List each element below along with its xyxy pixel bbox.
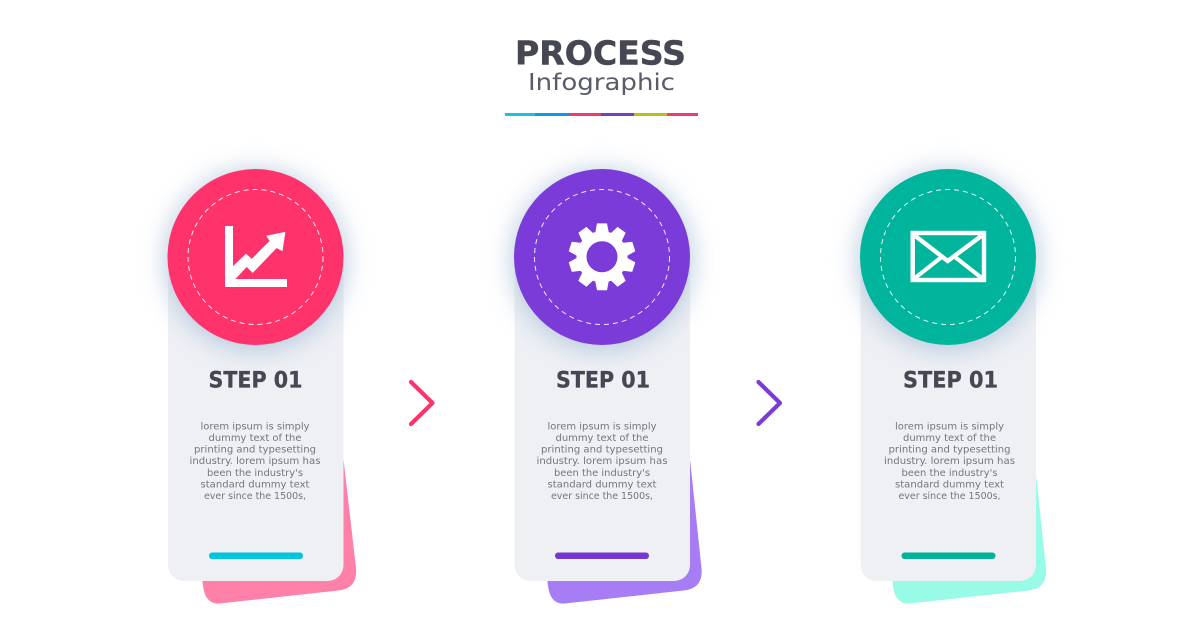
card body — [168, 250, 344, 581]
dashed ring — [534, 190, 670, 324]
body text: been the industry's — [207, 468, 303, 479]
panel: step 2 — [512, 169, 702, 604]
arrow: purple chevron — [758, 382, 780, 424]
body text: ever since the 1500s, — [551, 491, 653, 502]
step heading: STEP 01 — [208, 368, 302, 394]
step heading: STEP 01 — [556, 368, 650, 394]
body text: standard dummy text — [200, 479, 310, 490]
body text: dummy text of the — [556, 433, 649, 444]
body text — [536, 422, 668, 502]
icon: growth chart — [225, 226, 287, 287]
accent bar — [555, 552, 649, 559]
icon: gear — [568, 223, 636, 290]
circle badge — [514, 169, 690, 345]
title: Infographic — [528, 70, 675, 96]
back card: purple — [546, 445, 702, 604]
body text — [190, 422, 321, 502]
dashed ring — [880, 190, 1016, 324]
body text: dummy text of the — [903, 433, 996, 444]
body text: industry. lorem ipsum has — [190, 456, 321, 467]
dashed ring — [188, 190, 323, 324]
title: PROCESS — [515, 34, 686, 72]
circle badge — [860, 169, 1036, 345]
body text: lorem ipsum is simply — [548, 422, 657, 432]
body text: lorem ipsum is simply — [200, 422, 310, 432]
body text: printing and typesetting — [194, 445, 316, 456]
title underline: multicolour — [505, 113, 698, 116]
title — [515, 34, 686, 96]
body text: been the industry's — [902, 468, 998, 479]
panel: step 3 — [858, 169, 1046, 604]
step heading: STEP 01 — [903, 368, 998, 394]
body text: standard dummy text — [895, 479, 1004, 490]
body text: standard dummy text — [548, 479, 657, 490]
body text: dummy text of the — [208, 433, 302, 444]
icon: envelope — [913, 233, 984, 280]
body text: ever since the 1500s, — [204, 491, 306, 502]
accent bar — [902, 552, 996, 559]
circle shadow — [512, 170, 692, 350]
circle shadow — [858, 170, 1038, 350]
body text: industry. lorem ipsum has — [536, 456, 668, 467]
card body — [514, 250, 690, 581]
body text: printing and typesetting — [541, 445, 663, 456]
back card: mint — [891, 460, 1046, 604]
circle badge — [168, 169, 344, 345]
body text: industry. lorem ipsum has — [884, 456, 1015, 467]
body text: lorem ipsum is simply — [895, 422, 1004, 432]
body text: ever since the 1500s, — [898, 491, 1000, 502]
body text: printing and typesetting — [888, 445, 1010, 456]
body text — [884, 422, 1015, 502]
card body — [860, 250, 1036, 581]
arrow: pink chevron — [411, 382, 432, 424]
accent bar — [209, 552, 303, 559]
back card: pink — [201, 455, 356, 604]
circle shadow — [166, 170, 346, 350]
body text: been the industry's — [554, 468, 650, 479]
panel: step 1 — [166, 169, 356, 604]
